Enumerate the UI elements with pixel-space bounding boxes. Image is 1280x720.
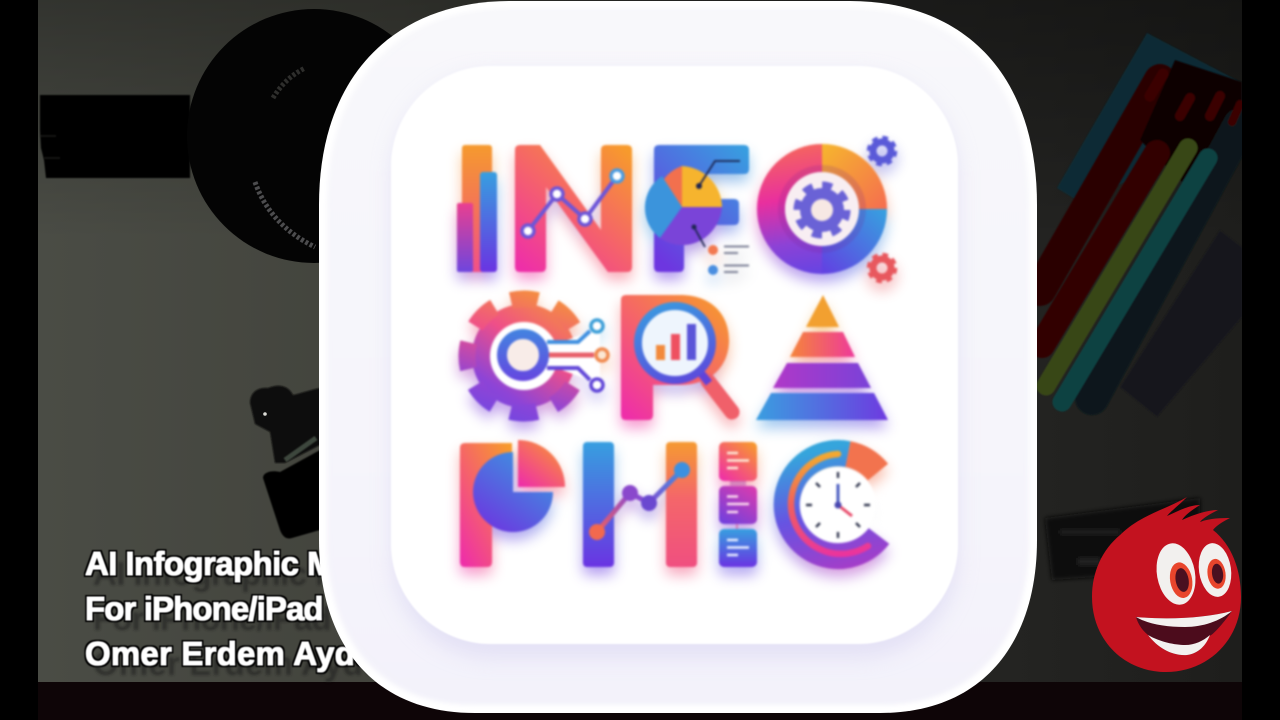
figurine and cable <box>250 386 320 538</box>
caption lines: AI Infographic M <box>85 545 334 582</box>
small red gear <box>869 255 895 281</box>
letter H with line chart <box>583 442 697 567</box>
black pen tops <box>1140 60 1242 190</box>
mascot: red ball <box>1092 497 1241 672</box>
letter P with pie <box>460 440 565 567</box>
icon inner face <box>391 66 958 644</box>
letter I list blocks <box>719 442 757 567</box>
letter C with clock <box>787 453 879 556</box>
red pen <box>1040 80 1160 290</box>
icon outer plate face <box>327 8 1029 705</box>
caption shadow <box>93 555 382 682</box>
caption lines: For iPhone/iPad <box>85 590 323 627</box>
caption shadow: For iPhone/iPad <box>93 600 331 637</box>
navy pen <box>1092 125 1240 398</box>
lens bars <box>656 345 665 360</box>
letter F with pie chart <box>645 145 749 275</box>
dark red pen <box>1042 153 1157 345</box>
olive pen <box>1046 148 1188 386</box>
center gear <box>797 185 847 235</box>
pens and papers <box>1040 33 1242 417</box>
letter I with bars <box>457 145 497 272</box>
right eye <box>1195 541 1235 599</box>
letter N with line chart <box>515 145 632 272</box>
caption lines <box>85 545 374 672</box>
letter A pyramid <box>756 295 888 420</box>
magnifier handle <box>708 381 732 412</box>
letter R with magnifier <box>621 295 732 420</box>
clock face <box>800 467 876 543</box>
caption text <box>85 545 382 682</box>
red pen tops <box>1150 74 1163 96</box>
gear with circuit <box>455 287 608 425</box>
caption shadow: Omer Erdem Ayde <box>93 645 382 682</box>
teal pen <box>1062 158 1208 402</box>
magnifier lens <box>638 306 712 380</box>
icon outer plate rim <box>319 1 1037 713</box>
headset silhouette <box>40 9 441 263</box>
small blue gear <box>869 138 895 164</box>
mouth <box>1136 611 1232 655</box>
grey note paper <box>1120 230 1242 417</box>
icon inner shadow <box>392 74 958 658</box>
app icon <box>319 1 1037 713</box>
caption shadow: AI Infographic M <box>93 555 342 592</box>
pens group <box>1040 60 1242 402</box>
letter O donut with gear <box>771 158 873 260</box>
caption lines: Omer Erdem Ayde <box>85 635 374 672</box>
eraser box <box>1045 498 1200 580</box>
artwork letters <box>455 138 895 567</box>
left eye <box>1152 540 1200 608</box>
teal paper <box>1057 33 1242 202</box>
